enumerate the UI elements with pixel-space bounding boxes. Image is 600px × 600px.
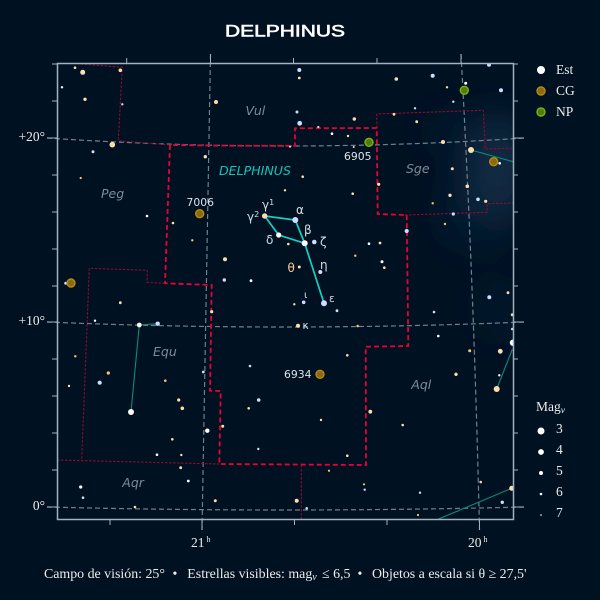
axis labels	[18, 129, 488, 550]
footer caption: Campo de visión: 25°	[44, 567, 165, 582]
deep-sky labels	[186, 150, 371, 381]
legend: object types: Est	[556, 62, 574, 77]
star labels: 1	[269, 198, 274, 207]
neighbouring constellation boundaries	[57, 64, 513, 519]
legend: magnitudes: 6	[556, 484, 563, 499]
axis labels: +20°	[18, 129, 45, 144]
legend: magnitudes: 4	[556, 442, 563, 457]
star labels: ι	[304, 290, 308, 301]
star chart	[47, 54, 529, 530]
legend: object types: NP	[556, 104, 573, 119]
deep-sky labels: 6905	[344, 150, 371, 163]
deep-sky labels: 7006	[186, 196, 214, 209]
footer caption: Estrellas visibles: mag	[187, 567, 312, 582]
legend: object types	[537, 62, 575, 119]
legend: magnitudes: Mag	[536, 399, 561, 414]
star labels: γ	[262, 198, 269, 212]
Delphinus stars	[262, 213, 327, 328]
star labels: ζ	[320, 235, 327, 249]
footer caption: •	[172, 567, 178, 582]
deep-sky labels: 6934	[284, 368, 312, 381]
star labels: 2	[254, 210, 259, 219]
star labels: γ	[247, 210, 254, 224]
axis labels: 21	[191, 535, 204, 550]
axis labels: 20	[468, 535, 482, 550]
star labels: η	[320, 258, 328, 272]
legend: magnitudes	[536, 399, 566, 520]
legend: object types: CG	[556, 83, 575, 98]
footer caption: Objetos a escala si θ ≥ 27,5'	[372, 567, 526, 582]
constellation names: DELPHINUS	[219, 163, 291, 178]
axis labels: +10°	[18, 313, 45, 328]
star labels: δ	[266, 233, 273, 247]
faint constellation lines	[131, 150, 513, 519]
legend: magnitudes: 5	[556, 463, 563, 478]
frame and ticks	[47, 54, 524, 530]
footer caption: •	[358, 567, 362, 582]
stars	[61, 63, 516, 516]
footer caption: ≤ 6,5	[322, 567, 351, 582]
star labels: θ	[288, 261, 295, 275]
constellation names: Vul	[246, 103, 266, 118]
star labels: β	[304, 223, 312, 237]
star labels	[247, 198, 335, 332]
footer caption: v	[312, 572, 317, 583]
axis labels: h	[484, 535, 488, 544]
star labels: κ	[302, 320, 309, 332]
axis labels: 0°	[33, 498, 45, 513]
title: DELPHINUS	[225, 22, 345, 40]
axis labels: h	[206, 535, 210, 544]
nebula glow	[446, 110, 513, 242]
constellation names: Aql	[410, 377, 432, 392]
legend: magnitudes: v	[561, 406, 566, 416]
Delphinus boundary	[165, 128, 408, 465]
legend: magnitudes: 7	[556, 505, 563, 520]
legend: magnitudes: 3	[556, 421, 563, 436]
star labels: α	[296, 203, 304, 217]
constellation names	[101, 103, 432, 490]
constellation names: Peg	[101, 186, 124, 201]
constellation names: Aqr	[121, 475, 145, 490]
Delphinus constellation lines	[265, 216, 324, 303]
constellation names: Sge	[406, 161, 430, 176]
star labels: ε	[329, 293, 335, 305]
deep-sky objects	[67, 86, 498, 378]
constellation names: Equ	[153, 344, 177, 359]
coordinate grid	[47, 54, 524, 530]
